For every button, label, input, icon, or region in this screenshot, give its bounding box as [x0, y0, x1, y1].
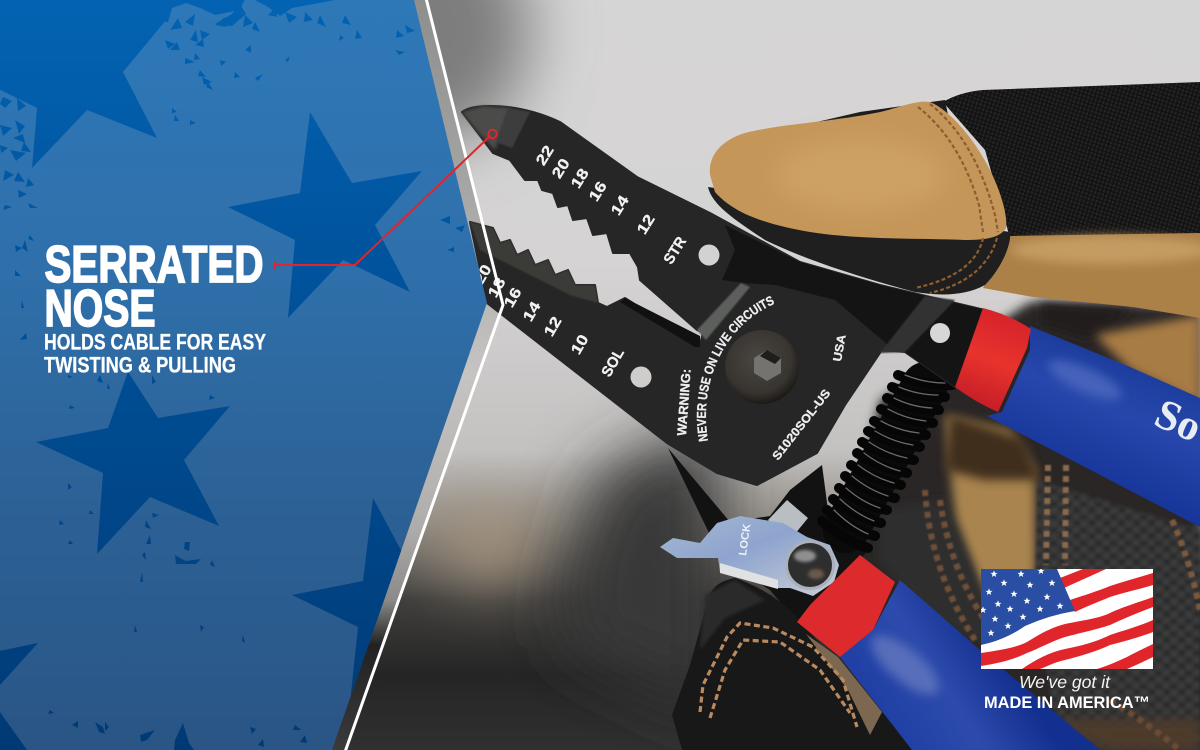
heading	[44, 236, 264, 338]
grip highlight	[1044, 353, 1126, 407]
warning text: NEVER USE ON LIVE CIRCUITS	[696, 296, 774, 442]
upper blue grip	[987, 326, 1200, 527]
stars	[0, 0, 422, 750]
shadowed upper body	[722, 225, 985, 387]
warning text: WARNING:	[674, 368, 694, 436]
rivet	[785, 540, 835, 590]
callout leader line	[275, 130, 497, 270]
lower jaw tooth shading	[470, 222, 598, 303]
made in america label: MADE IN AMERICA™	[984, 694, 1150, 712]
gauge numbers: upper jaw: 12	[634, 212, 659, 238]
lock stamp: LOCK	[737, 523, 753, 556]
lower handle	[797, 555, 1100, 750]
tool body and jaws	[462, 106, 985, 485]
warning text: USA	[830, 333, 849, 363]
red collar	[955, 308, 1031, 412]
tan edge	[806, 634, 882, 735]
gauge numbers: upper jaw	[533, 143, 690, 267]
fingertip stitching	[915, 104, 998, 293]
gauge numbers: lower jaw: 20	[471, 262, 495, 288]
lower glove	[672, 578, 925, 750]
gauge numbers: upper jaw: 22	[533, 143, 558, 169]
tagline: We've got it	[1019, 672, 1111, 692]
lower blue grip	[840, 580, 1100, 750]
waving flag	[980, 567, 1153, 669]
gauge numbers: lower jaw: 16	[501, 285, 525, 311]
upper handle	[955, 308, 1200, 527]
arm highlight	[880, 296, 955, 353]
warning text: S1020SOL-US	[769, 386, 833, 463]
badge: made in america	[980, 567, 1153, 712]
hole: lower jaw	[630, 366, 652, 388]
gauge numbers: lower jaw: 14	[520, 298, 545, 325]
tip texture	[462, 106, 510, 150]
tan fingertip	[710, 102, 1006, 240]
lock tab	[660, 500, 839, 596]
spring	[822, 375, 952, 548]
warning text	[674, 296, 849, 463]
gauge numbers: upper jaw: 14	[608, 192, 633, 219]
gauge numbers: lower jaw: SOL	[598, 346, 628, 380]
gauge numbers: upper jaw: 16	[586, 179, 611, 205]
gauge numbers: lower jaw: 10	[568, 332, 592, 358]
white chevron line	[345, 0, 503, 750]
subheading: HOLDS CABLE FOR EASY	[44, 330, 266, 354]
pivot screw	[725, 330, 799, 404]
blue panel	[0, 0, 520, 750]
heading: SERRATED	[44, 236, 264, 294]
subheading	[44, 330, 266, 378]
blurred glove behind tool	[840, 302, 1200, 750]
gauge numbers: lower jaw: 18	[485, 275, 509, 301]
tool: black stripper head	[460, 104, 983, 486]
lower red collar	[797, 555, 895, 657]
stitching	[700, 623, 857, 727]
hole: handle joint	[930, 323, 950, 343]
subheading: TWISTING & PULLING	[44, 352, 236, 378]
distressed specks	[0, 7, 465, 750]
gauge numbers: upper jaw: 18	[568, 166, 593, 192]
gauge numbers: lower jaw: 12	[541, 314, 565, 340]
gauge numbers: lower jaw	[471, 262, 628, 380]
black fingertip edge	[708, 187, 1010, 294]
gauge numbers: upper jaw: 20	[549, 156, 574, 182]
hole: upper jaw	[698, 244, 720, 266]
lower grip highlight	[863, 626, 947, 704]
tan cuff	[983, 233, 1200, 318]
angled band beside panel	[332, 0, 503, 750]
knit sleeve	[943, 82, 1200, 238]
metal highlight	[697, 283, 750, 340]
heading: NOSE	[44, 280, 156, 338]
gauge numbers: upper jaw: STR	[660, 234, 690, 267]
slot	[620, 298, 700, 347]
thumb	[708, 82, 1200, 318]
lower tool arm	[668, 448, 866, 622]
